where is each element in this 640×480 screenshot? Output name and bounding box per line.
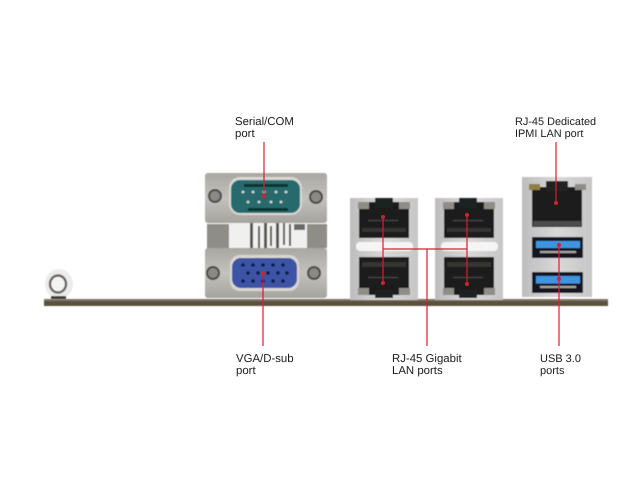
label: gigabit LAN ports: RJ-45 Gigabit: [392, 353, 462, 365]
label: USB 3.0 ports: USB 3.0: [540, 353, 581, 365]
circuit board edge: [44, 299, 608, 306]
label: dedicated IPMI LAN port: RJ-45 Dedicated: [515, 116, 596, 128]
serial and VGA connector stack: [205, 173, 327, 298]
label: serial port: port: [235, 128, 255, 140]
mounting standoff: [45, 269, 73, 299]
IPMI LAN and USB stack: [522, 177, 592, 297]
label: gigabit LAN ports: LAN ports: [392, 365, 443, 377]
label: VGA port: port: [236, 365, 256, 377]
dedicated LAN jack: [529, 181, 586, 227]
label: dedicated IPMI LAN port: IPMI LAN port: [515, 128, 583, 140]
label: serial port: Serial/COM: [235, 116, 294, 128]
USB 3.0 lower port: [532, 272, 583, 293]
serial port plate: [205, 173, 327, 223]
label: USB 3.0 ports: ports: [540, 365, 565, 377]
label: VGA port: VGA/D-sub: [236, 353, 294, 365]
left RJ-45 LAN stack: [350, 198, 418, 300]
callout lines: [263, 142, 559, 346]
right RJ-45 LAN stack: [435, 198, 503, 300]
VGA port plate: [205, 248, 327, 298]
callout dots: [261, 194, 561, 286]
USB 3.0 upper port: [532, 237, 583, 258]
bracket between connectors: [207, 223, 327, 249]
